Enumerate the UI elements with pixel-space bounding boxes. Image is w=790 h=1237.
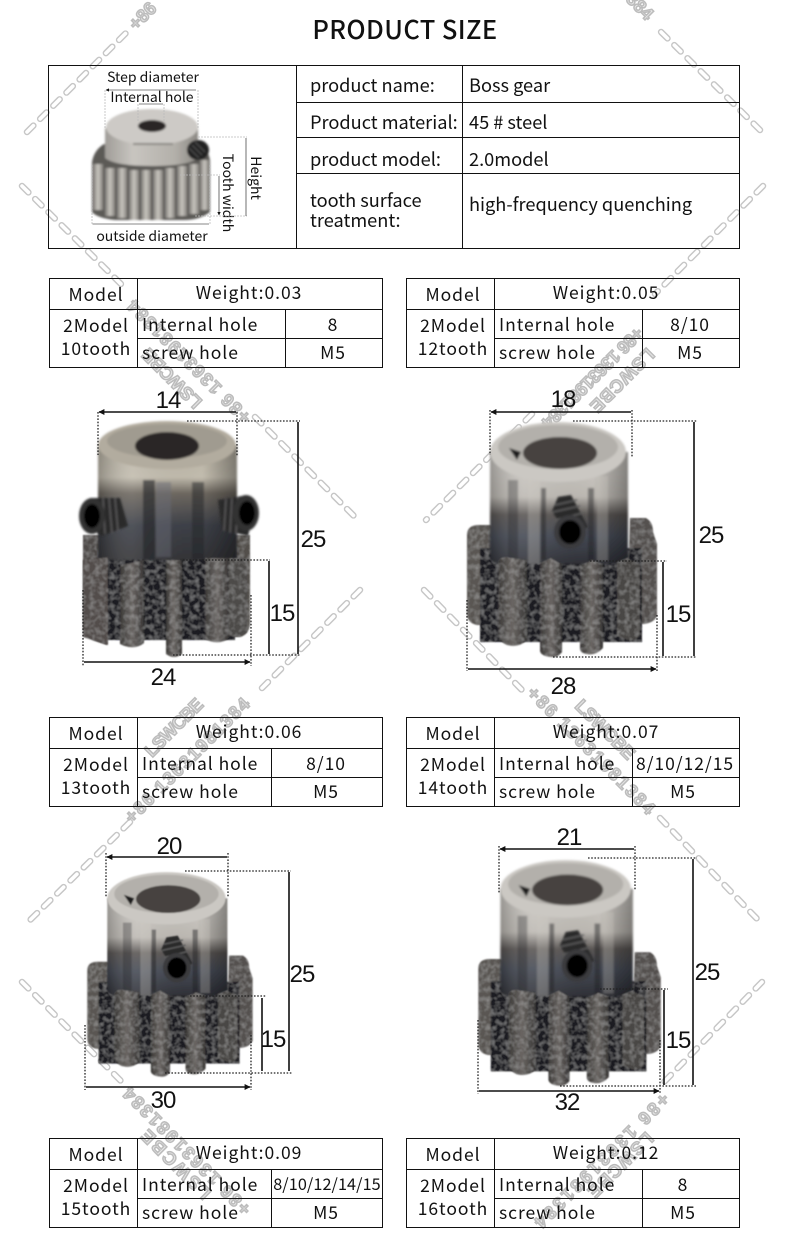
dimensions: 15 tooth [85,833,315,1114]
watermark text: +86 13631981384 [121,694,254,827]
spec table: 12 tooth: 12tooth [418,336,488,361]
right set screw [218,495,259,536]
dimensions: 10 tooth: 15 [270,600,295,627]
spec table: 14 tooth: Internal hole [499,751,615,776]
spec row values [469,72,692,217]
dimensions: 16 tooth: 15 [666,1027,691,1054]
dimensions: 16 tooth: 21 [557,824,582,851]
spec table: 15 tooth [49,1138,383,1228]
spec table: 14 tooth: M5 [670,779,696,804]
dimensions: 12 tooth: 25 [699,522,724,549]
watermark text: LSWCBE [584,1128,657,1202]
dimensions: 15 tooth: 30 [151,1087,176,1114]
spec row values: Boss gear [469,72,551,98]
spec table: 15 tooth: M5 [313,1200,339,1225]
key dimension lines [92,90,247,224]
spec table: 13 tooth: 2Model [63,752,129,777]
spec table: 12 tooth: Model [425,282,481,307]
left set screw [79,498,128,536]
dimensions: 10 tooth: 14 [156,387,181,414]
dimensions: 10 tooth: 25 [301,526,326,553]
title: PRODUCT SIZE [312,10,498,47]
spec table: 10 tooth: Internal hole [142,312,258,337]
spec table: 12 tooth: 2Model [420,313,486,338]
key labels: outside diameter [96,226,208,246]
watermark text: LSWCBE [571,696,639,764]
spec table: 15 tooth: Model [68,1142,124,1167]
spec table: 13 tooth: M5 [313,779,339,804]
gear set screw [187,140,209,160]
panel: product spec table [48,65,740,248]
spec table: 13 tooth: 8/10 [306,751,346,776]
spec table: 15 tooth: 15tooth [61,1196,131,1221]
spec table: 15 tooth: Internal hole [142,1172,258,1197]
watermark text: LSWCBE [138,344,206,412]
dimensions: 16 tooth [478,824,720,1116]
gear photo: 12 tooth [467,422,657,657]
gear hub [105,128,198,166]
spec table: 10 tooth: Model [68,282,124,307]
watermark text: +86 13631981384 [123,296,255,427]
spec table: 10 tooth: 8 [328,312,338,337]
gear teeth [92,109,210,220]
spec row values: high-frequency quenching [469,191,692,217]
dimensions: 15 tooth: 25 [290,961,315,988]
spec table: 13 tooth: 13tooth [61,775,131,800]
watermark text: +86 13631981384 [523,683,659,818]
dimensions: 10 tooth [83,387,326,691]
key labels: Height [246,156,266,200]
spec table: 15 tooth: 2Model [63,1173,129,1198]
spec row labels: product name: [310,72,435,98]
watermark text: +86 13631981384 [119,1084,255,1219]
spec table: 12 tooth: Internal hole [499,312,615,337]
spec table: 15 tooth: 8/10/12/14/15 [273,1171,381,1195]
spec table: 14 tooth [406,717,740,806]
spec row values: 45 # steel [469,109,547,135]
spec table: 10 tooth: screw hole [142,340,239,365]
spec table: 14 tooth: Weight:0.07 [553,719,659,744]
spec table: 16 tooth: Weight:0.12 [553,1140,659,1165]
key labels: Tooth width [218,154,238,232]
key labels [96,67,266,246]
spec table: 13 tooth: Model [68,721,124,746]
spec table: 12 tooth [406,278,740,368]
gear photo: 16 tooth [478,860,661,1086]
dimensions: 15 tooth: 15 [261,1026,286,1053]
spec table: 14 tooth: 2Model [420,752,486,777]
spec table: 14 tooth: screw hole [499,779,596,804]
spec table: 14 tooth: 8/10/12/15 [636,751,734,776]
watermark text: +86 13631981384 [530,1089,673,1232]
spec table: 16 tooth: M5 [670,1200,696,1225]
dimensions: 12 tooth [467,386,724,700]
spec table: 12 tooth: Weight:0.05 [553,280,659,305]
spec table: 10 tooth: 2Model [63,313,129,338]
watermark text: LSWCBE [586,344,658,416]
spec table: 14 tooth: Model [425,721,481,746]
spec table: 16 tooth: Internal hole [499,1172,615,1197]
dimensions: 12 tooth: 15 [666,601,691,628]
spec table: 16 tooth [406,1138,740,1228]
dimensions: 12 tooth: 18 [551,386,576,413]
spec table: 12 tooth: screw hole [499,340,596,365]
spec table: 14 tooth: 14tooth [418,775,488,800]
spec table: 16 tooth: screw hole [499,1200,596,1225]
key labels: Step diameter [107,67,199,87]
spec row values: 2.0model [469,146,549,172]
spec table: 15 tooth: screw hole [142,1200,239,1225]
watermark text: +86 13631981384 [538,323,647,433]
spec table: 16 tooth: 8 [678,1172,688,1197]
spec table: 16 tooth: Model [425,1142,481,1167]
dimensions: 16 tooth: 32 [555,1089,580,1116]
spec row labels: tooth surface [310,187,422,213]
spec table: 12 tooth: 8/10 [670,312,710,337]
gear photo: 15 tooth [87,872,253,1077]
spec table: 13 tooth [49,717,383,806]
spec row labels: treatment: [310,207,401,233]
gear photo: 10 tooth [79,421,259,657]
key labels: Internal hole [110,87,194,107]
watermark text [119,0,673,1232]
dimensions: 16 tooth: 25 [695,959,720,986]
spec table: 13 tooth: Weight:0.06 [196,719,302,744]
dimensions: 15 tooth: 20 [157,833,182,860]
spec table: 12 tooth: M5 [677,340,703,365]
spec table: 10 tooth: Weight:0.03 [196,280,302,305]
spec table: 16 tooth: 2Model [420,1173,486,1198]
spec table: 10 tooth [49,278,383,368]
spec table: 16 tooth: 16tooth [418,1196,488,1221]
spec table: 10 tooth: M5 [320,340,346,365]
spec table: 10 tooth: 10tooth [61,336,131,361]
spec row labels [310,72,458,233]
spec row labels: product model: [310,146,441,172]
dimensions: 10 tooth: 24 [151,664,176,691]
spec table: 13 tooth: screw hole [142,779,239,804]
diagram: dimension key gear [92,67,266,246]
spec table: 15 tooth: Weight:0.09 [196,1140,302,1165]
spec row labels: Product material: [310,109,458,135]
watermark text: LSWCBE [137,1126,215,1203]
watermark text: LSWCBE [141,694,207,761]
dimensions: 12 tooth: 28 [551,673,576,700]
spec table: 13 tooth: Internal hole [142,751,258,776]
